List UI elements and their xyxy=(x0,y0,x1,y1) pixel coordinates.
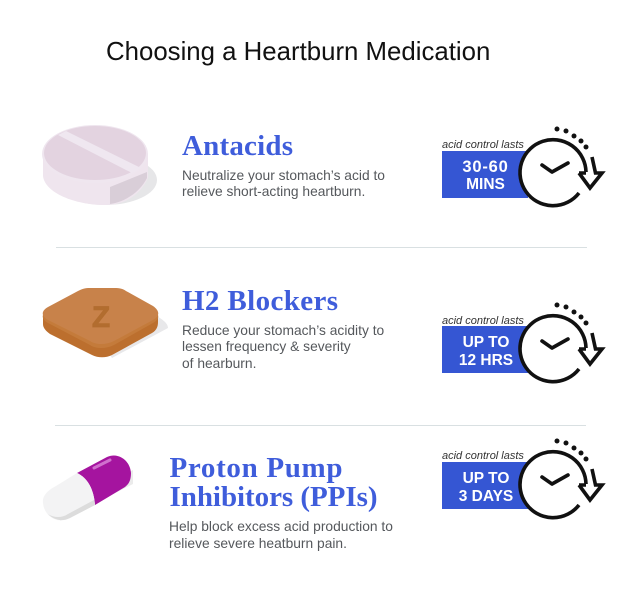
icon: round tablet xyxy=(42,125,157,205)
icon: brown tablet xyxy=(43,288,168,358)
callout: duration up to 3 days: acid control lasts xyxy=(442,450,524,462)
heading: h2 blockers: H2 Blockers xyxy=(182,285,338,317)
callout: duration up to 3 days: UP TO xyxy=(463,470,509,487)
callout: duration 30-60 mins xyxy=(442,126,602,206)
heading: proton pump inhibitors xyxy=(170,452,378,513)
callout: duration up to 3 days xyxy=(442,438,602,518)
callout: duration up to 12 hrs: acid control lasts xyxy=(442,315,524,327)
heading: proton pump inhibitors: Inhibitors (PPIs) xyxy=(170,481,378,513)
icon: clock xyxy=(520,302,602,382)
panel: h2 blockers xyxy=(43,285,602,382)
text: antacids description: Neutralize your stomach’s acid to xyxy=(182,168,385,183)
callout: duration up to 12 hrs: UP TO xyxy=(463,334,509,351)
callout: duration 30-60 mins: 30-60 xyxy=(462,158,509,176)
panel: proton pump inhibitors xyxy=(43,438,602,551)
text: antacids description: relieve short-acting heartburn. xyxy=(182,184,365,199)
callout: duration up to 12 hrs: 12 HRS xyxy=(459,352,513,369)
callout: duration up to 3 days: 3 DAYS xyxy=(459,488,513,505)
panel: antacids xyxy=(42,125,602,206)
callout: duration up to 12 hrs xyxy=(442,302,602,382)
text: h2 blockers description: of hearburn. xyxy=(182,356,256,371)
callout: duration 30-60 mins: acid control lasts xyxy=(442,139,524,151)
icon: brown tablet: Z xyxy=(92,301,110,334)
callout: duration 30-60 mins: MINS xyxy=(466,176,505,193)
icon: capsule xyxy=(43,455,133,521)
text: h2 blockers description: Reduce your stomach’s acidity to xyxy=(182,323,385,338)
icon: clock xyxy=(520,126,602,206)
heading: antacids: Antacids xyxy=(182,130,293,162)
text: ppi description: relieve severe heatburn pain. xyxy=(169,536,347,551)
text: ppi description: Help block excess acid production to xyxy=(169,519,393,534)
heading: proton pump inhibitors: Proton Pump xyxy=(170,452,342,484)
title: Choosing a Heartburn Medication xyxy=(106,38,490,66)
icon: clock xyxy=(520,438,602,518)
text: h2 blockers description: lessen frequency & severity xyxy=(182,339,351,354)
